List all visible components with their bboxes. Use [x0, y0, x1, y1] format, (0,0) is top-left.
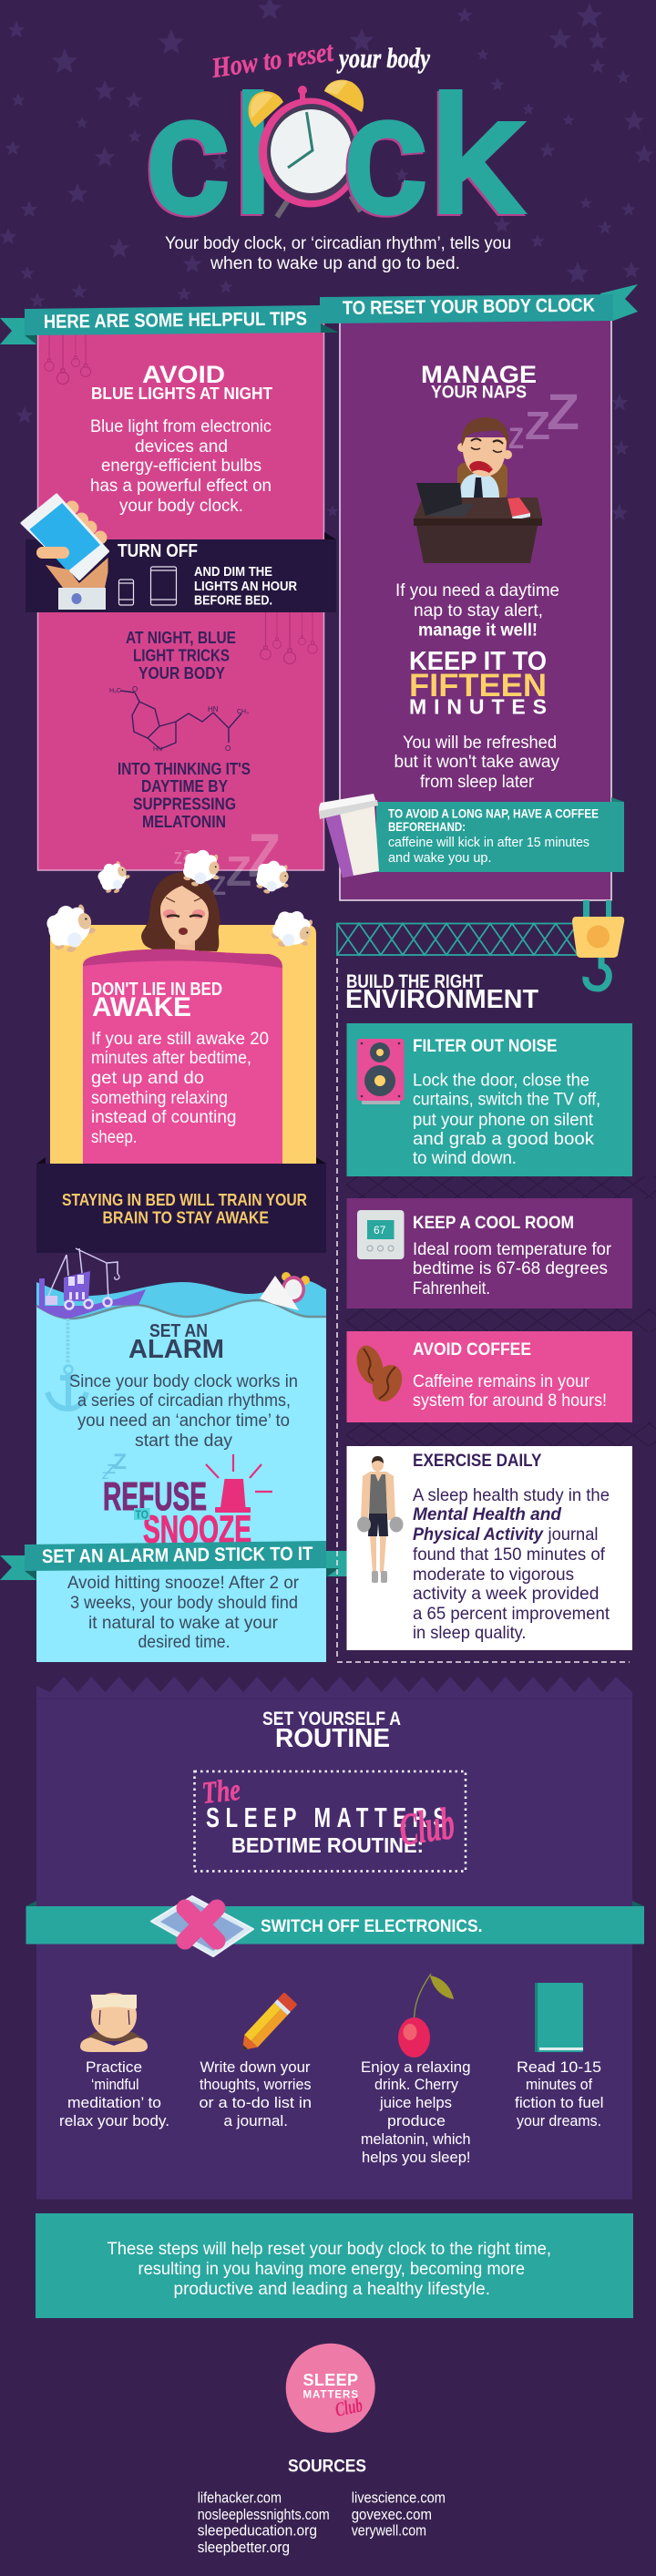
item: relaxing drink: drink. Cherry [374, 2076, 458, 2093]
logo box: sleep matters club bedtime routine: SLEEP MATTERS [206, 1801, 446, 1833]
panel: conclusion: resulting in you having more energy, becoming more [138, 2259, 525, 2279]
text: at night blue light tricks your body [126, 629, 236, 682]
icon: cherry [398, 1974, 454, 2058]
text: avoid hitting snooze [67, 1574, 300, 1652]
panel: avoid blue lights (pink) [38, 310, 324, 870]
heading: avoid blue lights at night [91, 361, 273, 403]
icon: zzz: Z [508, 422, 524, 455]
icon: melatonin molecule: CH₃ [237, 709, 249, 715]
icon: melatonin molecule: HN [153, 746, 162, 753]
panel: avoid coffee: system for around 8 hours! [413, 1391, 607, 1411]
ribbon: to reset your body clock [320, 284, 638, 323]
list: sources: verywell.com [352, 2522, 426, 2540]
text: if you are still awake: instead of counting [91, 1107, 237, 1127]
heading: build the right environment: BUILD THE RIGHT [346, 971, 483, 992]
text: blue light body copy: energy-efficient bulbs [101, 457, 261, 476]
text: if you are still awake: minutes after bedtime, [91, 1048, 251, 1068]
panel: filter out noise: and grab a good book [413, 1129, 594, 1149]
title: clock wordmark with alarm clock: l [235, 64, 272, 245]
title: clock wordmark with alarm clock: k [431, 64, 520, 245]
heading: refuse to snooze: TO [135, 1509, 149, 1522]
panel: filter out noise: put your phone on silent [413, 1110, 594, 1130]
icon: melatonin molecule: O [225, 744, 231, 753]
panel: filter out noise [346, 1023, 632, 1176]
text: at night blue light tricks your body: YOUR BODY [138, 664, 225, 682]
icon: headboard [50, 925, 316, 1164]
list: sources: lifehacker.com [198, 2489, 282, 2507]
panel: exercise daily: Physical Activity [413, 1524, 544, 1545]
callout: staying in bed: BRAIN TO STAY AWAKE [102, 1208, 269, 1226]
icon: blanket [83, 949, 282, 1164]
heading: avoid blue lights at night: BLUE LIGHTS AT NIGHT [91, 384, 273, 403]
text: you will be refreshed: You will be refreshed [403, 734, 557, 753]
panel: avoid coffee: AVOID COFFEE [413, 1340, 531, 1360]
ribbon: set an alarm and stick to it: SET AN ALARM AND STICK TO IT [42, 1544, 313, 1567]
heading: keep it to fifteen minutes [409, 647, 547, 718]
panel: conclusion: These steps will help reset your body clock to the right time, [108, 2239, 551, 2259]
heading: refuse to snooze [103, 1474, 251, 1552]
logo: sleep matters club [286, 2344, 375, 2433]
callout: coffee before nap: TO AVOID A LONG NAP, HAVE A COFFEE [388, 807, 599, 820]
item: read fiction [515, 1983, 603, 2130]
panel: filter out noise: curtains, switch the TV off, [413, 1090, 600, 1110]
icon: zzz [508, 383, 579, 455]
title: how to reset your body: How to reset [209, 35, 336, 84]
callout: coffee before nap: caffeine will kick in after 15 minutes [388, 835, 589, 850]
text: if you need a daytime nap: nap to stay alert, [414, 601, 543, 621]
icon: thermostat: 67 [374, 1224, 386, 1237]
ribbon: to reset your body clock: TO RESET YOUR BODY CLOCK [343, 295, 595, 319]
icon: man with dumbbells [357, 1456, 403, 1583]
text: if you are still awake [91, 1029, 269, 1147]
illustration: zzz behind woman: Z [226, 847, 251, 895]
illustration: zzz behind woman [174, 821, 281, 901]
icon: hanging bulbs bottom right [261, 603, 317, 663]
text: if you need a daytime nap: manage it well! [418, 621, 538, 640]
icon: alarm beacon [206, 1454, 272, 1513]
text: if you are still awake: If you are still awake 20 [91, 1029, 269, 1049]
title: clock wordmark with alarm clock: l [233, 66, 270, 247]
heading: don't lie in bed awake: AWAKE [92, 992, 191, 1022]
heading: set an alarm: ALARM [128, 1335, 224, 1364]
title: how to reset your body [209, 35, 430, 84]
heading: keep it to fifteen minutes: FIFTEEN [409, 668, 547, 703]
lattice strips between boxes [346, 1176, 656, 1446]
panel: exercise daily: found that 150 minutes of [413, 1545, 606, 1565]
logo box: sleep matters club bedtime routine: Club [396, 1797, 457, 1855]
heading: build the right environment: ENVIRONMENT [345, 985, 538, 1014]
text: and dim the lights: LIGHTS AN HOUR [194, 579, 297, 594]
panel: exercise daily: EXERCISE DAILY [413, 1452, 542, 1471]
item: write down thoughts: a journal. [224, 2112, 288, 2130]
panel: exercise daily: activity a week provided [413, 1584, 600, 1604]
heading: manage your naps: MANAGE [421, 361, 537, 388]
icon: anchor and chain [47, 1319, 87, 1409]
band: switch off electronics [26, 1896, 644, 1956]
list: sources: sleepbetter.org [198, 2539, 290, 2556]
icon: hanging bulbs top left [45, 323, 91, 385]
icon: alarm clock [248, 80, 364, 217]
text: you will be refreshed [394, 734, 559, 792]
heading: keep it to fifteen minutes: KEEP IT TO [409, 647, 547, 676]
illustration: sea with boat and iceberg [36, 1248, 326, 1330]
item: read fiction: Read 10-15 [517, 2058, 601, 2076]
title: how to reset your body: your body [336, 42, 430, 74]
panel: keep a cool room [346, 1198, 632, 1309]
intro text [165, 234, 511, 273]
heading: sources: SOURCES [288, 2458, 366, 2477]
text: since your body clock [69, 1372, 298, 1451]
item: mindful meditation: meditation’ to [67, 2094, 161, 2111]
illustration: zzz behind woman: Z [174, 849, 182, 867]
ribbon: set an alarm and stick to it [0, 1541, 364, 1580]
icon: book [535, 1983, 583, 2052]
title: clock wordmark with alarm clock: c [344, 64, 425, 245]
background stars [0, 0, 653, 520]
item: relaxing drink: helps you sleep! [362, 2149, 470, 2166]
panel: avoid coffee [346, 1331, 632, 1422]
icon: fishing boat [36, 1248, 146, 1319]
illustration: zzz behind woman: Z [183, 847, 190, 863]
illustration: zzz behind woman: Z [248, 821, 281, 890]
text: if you are still awake: something relaxing [91, 1088, 228, 1108]
heading: set an alarm: SET AN [149, 1321, 208, 1341]
list: sources: livescience.com [352, 2489, 446, 2507]
panel: don't lie in bed awake [44, 847, 319, 1164]
text: into thinking it's daytime: SUPPRESSING [133, 795, 236, 813]
text: if you need a daytime nap: If you need a daytime [395, 581, 559, 600]
callout: coffee before nap: and wake you up. [388, 850, 492, 866]
icon: tablet crossed out [151, 1896, 253, 1956]
icon: man asleep at desk [414, 417, 542, 563]
icon: thermostat [357, 1210, 405, 1259]
heading: set yourself a routine: SET YOURSELF A [262, 1709, 401, 1729]
heading: refuse to snooze: REFUSE [103, 1474, 207, 1519]
panel: exercise daily: in sleep quality. [413, 1623, 527, 1643]
list: sources [198, 2489, 446, 2556]
text: avoid hitting snooze: it natural to wake at your [88, 1614, 279, 1633]
item: write down thoughts: thoughts, worries [200, 2076, 312, 2093]
icon: crane truss and hook [337, 900, 624, 989]
text: and dim the lights: BEFORE BED. [194, 592, 272, 609]
text: and dim the lights: AND DIM THE [194, 564, 272, 580]
item: mindful meditation: relax your body. [59, 2112, 169, 2130]
text: you will be refreshed: but it won't take away [394, 753, 559, 772]
icon: hand holding phone [22, 495, 108, 610]
logo: sleep matters club: MATTERS [302, 2390, 358, 2401]
heading: manage your naps [421, 361, 537, 403]
item: relaxing drink [361, 1974, 470, 2166]
list: sources: govexec.com [352, 2506, 432, 2523]
heading: manage your naps: YOUR NAPS [431, 383, 527, 403]
item: relaxing drink: juice helps [379, 2094, 452, 2111]
text: blue light body copy: Blue light from electronic [90, 417, 272, 436]
list: sources: nosleeplessnights.com [198, 2506, 330, 2523]
title: clock wordmark with alarm clock: c [147, 64, 228, 245]
panel: set yourself a routine [26, 1677, 644, 2200]
text: at night blue light tricks your body: LIGHT TRICKS [133, 647, 230, 665]
text: into thinking it's daytime: MELATONIN [142, 813, 226, 831]
icon: small zzz: Z [102, 1471, 108, 1482]
icon: phone and tablet outlines [118, 567, 177, 605]
text: into thinking it's daytime: DAYTIME BY [141, 777, 228, 795]
item: mindful meditation: ‘mindful [91, 2076, 138, 2093]
panel: keep a cool room: Ideal room temperature for [413, 1239, 611, 1259]
heading: build the right environment [345, 971, 538, 1014]
text: avoid hitting snooze: Avoid hitting snooze! After 2 or [67, 1574, 300, 1593]
icon: melatonin molecule: HN [208, 705, 219, 713]
callout: staying in bed: STAYING IN BED WILL TRAIN YOUR [62, 1191, 307, 1209]
heading: don't lie in bed awake [91, 980, 222, 1022]
icon: speaker [357, 1039, 405, 1104]
panel: exercise daily: Mental Health and [413, 1504, 562, 1524]
heading: set yourself a routine [262, 1709, 401, 1753]
heading: set an alarm [128, 1321, 224, 1364]
text: since your body clock: start the day [135, 1432, 233, 1451]
item: read fiction: your dreams. [517, 2112, 601, 2130]
intro text: Your body clock, or ‘circadian rhythm’, tells you [165, 234, 511, 253]
text: into thinking it's daytime [118, 760, 251, 831]
text: into thinking it's daytime: INTO THINKING IT'S [118, 760, 251, 778]
text: avoid hitting snooze: desired time. [138, 1633, 230, 1652]
item: read fiction: fiction to fuel [515, 2094, 603, 2111]
text: since your body clock: a series of circadian rhythms, [77, 1391, 291, 1411]
text: blue light body copy: has a powerful effect on [90, 477, 272, 496]
title: clock wordmark with alarm clock: c [145, 66, 226, 247]
item: mindful meditation [59, 1993, 169, 2130]
panel: exercise daily [346, 1446, 632, 1650]
intro text: when to wake up and go to bed. [210, 254, 460, 273]
icon: woman in bed [141, 872, 220, 952]
text: blue light body copy [90, 417, 272, 516]
ribbon: here are some helpful tips [0, 305, 339, 344]
icon: melatonin molecule: O [132, 685, 138, 693]
dashed divider [337, 959, 630, 1662]
heading: refuse to snooze: SNOOZE [143, 1508, 251, 1552]
heading: keep it to fifteen minutes: MINUTES [409, 694, 547, 718]
text: blue light body copy: devices and [135, 437, 228, 457]
text: since your body clock: you need an ‘anchor time’ to [77, 1411, 290, 1431]
logo box: sleep matters club bedtime routine [195, 1771, 466, 1872]
callout: staying in bed [36, 1157, 326, 1253]
logo: sleep matters club: Club [333, 2393, 364, 2421]
icon: melatonin molecule [109, 685, 249, 753]
panel: conclusion [36, 2213, 633, 2318]
icon: sheep [44, 847, 319, 957]
callout: coffee before nap [376, 797, 624, 872]
logo box: sleep matters club bedtime routine: The [200, 1773, 242, 1811]
callout: coffee before nap: BEFOREHAND: [388, 820, 466, 834]
panel: exercise daily: a 65 percent improvement [413, 1604, 610, 1624]
title: clock wordmark with alarm clock: c [343, 66, 424, 247]
item: read fiction: minutes of [526, 2076, 592, 2093]
band: switch off electronics: SWITCH OFF ELECTRONICS. [261, 1917, 483, 1936]
item: relaxing drink: produce [387, 2112, 446, 2130]
text: at night blue light tricks your body: AT NIGHT, BLUE [126, 629, 236, 647]
callout: turn off [22, 495, 336, 612]
panel: filter out noise: to wind down. [413, 1148, 517, 1168]
panel: set an alarm (blue) [36, 1248, 326, 1662]
icon: small zzz: Z [113, 1450, 127, 1474]
icon: melatonin molecule: H₃C [109, 688, 121, 694]
text: if you are still awake: get up and do [91, 1068, 204, 1088]
item: relaxing drink: melatonin, which [361, 2130, 470, 2148]
title: clock wordmark with alarm clock: k [429, 66, 518, 247]
panel: filter out noise: FILTER OUT NOISE [413, 1037, 558, 1056]
item: write down thoughts [199, 1992, 312, 2130]
icon: meditating person [80, 1993, 148, 2052]
heading: set yourself a routine: ROUTINE [275, 1724, 390, 1753]
panel: conclusion: productive and leading a healthy lifestyle. [173, 2279, 490, 2299]
icon: small zzz: Z [107, 1462, 116, 1477]
heading: don't lie in bed awake: DON'T LIE IN BED [91, 980, 222, 1000]
text: and dim the lights [194, 564, 297, 609]
icon: pencil [236, 1992, 298, 2057]
text: if you need a daytime nap [395, 581, 559, 640]
list: sources: sleepeducation.org [198, 2522, 317, 2540]
panel: exercise daily: A sleep health study in the [413, 1485, 610, 1505]
item: write down thoughts: or a to-do list in [199, 2094, 312, 2111]
illustration: zzz behind woman: Z [211, 871, 226, 901]
panel: keep a cool room: KEEP A COOL ROOM [413, 1214, 574, 1233]
panel: filter out noise: Lock the door, close the [413, 1070, 589, 1090]
text: avoid hitting snooze: 3 weeks, your body should find [70, 1594, 298, 1613]
item: write down thoughts: Write down your [200, 2058, 311, 2076]
icon: small zzz [102, 1450, 127, 1482]
panel: manage your naps (purple) [340, 314, 611, 900]
text: if you are still awake: sheep. [91, 1127, 137, 1147]
icon: coffee beans [352, 1342, 407, 1406]
panel: avoid coffee: Caffeine remains in your [413, 1371, 589, 1391]
heading: avoid blue lights at night: AVOID [142, 361, 225, 388]
panel: exercise daily: journal [548, 1524, 598, 1545]
panel: exercise daily: moderate to vigorous [413, 1565, 574, 1585]
panel: keep a cool room: Fahrenheit. [413, 1278, 490, 1298]
item: mindful meditation: Practice [86, 2058, 142, 2076]
ribbon: here are some helpful tips: HERE ARE SOME HELPFUL TIPS [44, 308, 307, 333]
logo: sleep matters club: SLEEP [302, 2371, 358, 2389]
icon: zzz: Z [525, 404, 550, 448]
icon: zzz: Z [547, 383, 579, 440]
text: you will be refreshed: from sleep later [420, 773, 535, 792]
logo box: sleep matters club bedtime routine: BEDTIME ROUTINE: [231, 1833, 424, 1857]
title: clock wordmark with alarm clock [145, 64, 520, 247]
icon: iceberg with alarm clock [260, 1272, 310, 1310]
panel: keep a cool room: bedtime is 67-68 degrees [413, 1258, 608, 1278]
text: since your body clock: Since your body clock works in [69, 1372, 298, 1391]
icon: coffee cup [319, 794, 379, 877]
item: relaxing drink: Enjoy a relaxing [361, 2058, 470, 2076]
text: blue light body copy: your body clock. [119, 497, 243, 516]
heading: turn off: TURN OFF [118, 541, 198, 561]
